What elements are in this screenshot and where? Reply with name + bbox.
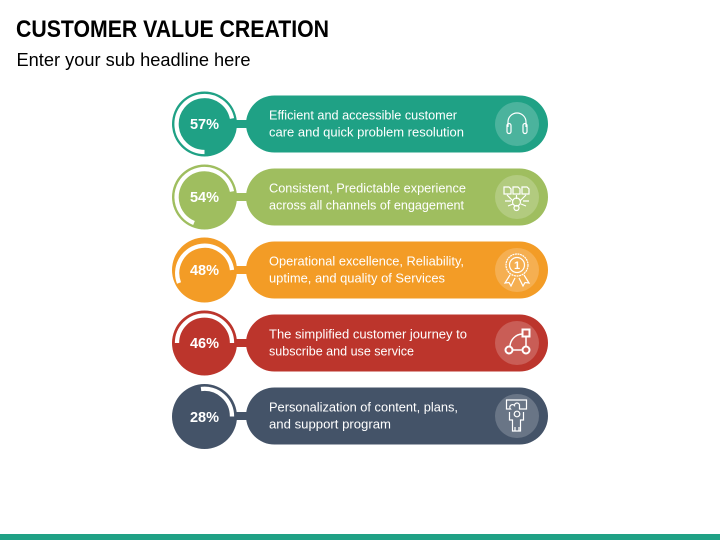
text 5: and support program	[269, 416, 391, 432]
text 5: Personalization of content, plans,	[269, 400, 458, 414]
progress circle 5: 28%	[190, 410, 219, 426]
text 3: Operational excellence, Reliability,	[269, 254, 464, 268]
text 2	[269, 180, 466, 212]
text 3: uptime, and quality of Services	[269, 270, 445, 286]
progress circle 1	[172, 92, 237, 156]
icon: headphones	[495, 102, 539, 146]
progress circle 4: 46%	[190, 336, 219, 352]
text 4: The simplified customer journey to	[269, 326, 467, 342]
bottom bar	[0, 534, 720, 540]
icon: documents network	[495, 175, 539, 219]
icon: journey path	[495, 321, 539, 365]
progress circle 3: 48%	[190, 263, 219, 279]
progress circle 3	[172, 238, 237, 302]
text 4: subscribe and use service	[269, 344, 414, 358]
subtitle: Enter your sub headline here	[16, 50, 250, 70]
connector and pill 4	[236, 314, 548, 372]
icon: person with puzzle	[495, 394, 539, 438]
progress circle 5	[172, 384, 237, 449]
connector and pill 5	[236, 388, 548, 444]
progress circle 2	[172, 164, 237, 230]
text 2: across all channels of engagement	[269, 198, 464, 212]
text 5	[269, 400, 458, 432]
text 1: care and quick problem resolution	[269, 124, 464, 140]
row 4: 46% customer journey	[172, 310, 548, 376]
title: CUSTOMER VALUE CREATION	[16, 16, 329, 43]
text 4	[269, 326, 467, 358]
text 1	[269, 108, 464, 140]
progress circle 1: 57%	[190, 117, 219, 133]
row 2: 54% consistent experience	[172, 164, 548, 230]
progress circle 2: 54%	[190, 190, 219, 206]
icon: award ribbon	[495, 248, 539, 292]
connector and pill 1	[236, 96, 548, 152]
row 1: 57% customer care	[172, 92, 548, 156]
progress circle 4	[172, 310, 237, 376]
text 1: Efficient and accessible customer	[269, 108, 458, 122]
connector and pill 3	[236, 242, 548, 298]
row 5: 28% personalization	[172, 384, 548, 449]
text 3	[269, 254, 464, 286]
connector and pill 2	[236, 168, 548, 226]
text 2: Consistent, Predictable experience	[269, 180, 466, 196]
icon: award ribbon: 1	[514, 260, 520, 272]
row 3: 48% operational excellence	[172, 238, 548, 302]
